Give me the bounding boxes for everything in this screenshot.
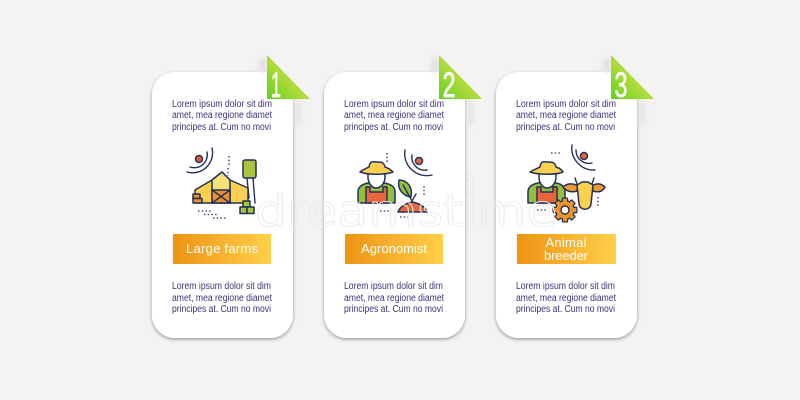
panel: card 3 background [496, 72, 637, 338]
label button: Large farms [173, 234, 271, 264]
top text 2: Lorem ipsum dolor sit dim [344, 99, 444, 110]
watermark over cards: dreamstime [255, 186, 557, 237]
panel: card 1 background [152, 72, 293, 338]
watermark [255, 173, 557, 237]
top text 3: Lorem ipsum dolor sit dim [516, 99, 616, 110]
top text 1: Lorem ipsum dolor sit dim [172, 99, 272, 110]
label button: Animal breeder: Animal [546, 235, 587, 250]
card 2: Agronomist [324, 55, 482, 338]
top text 1: principes at. Cum no movi [172, 122, 271, 133]
bottom text 1: Lorem ipsum dolor sit dim [172, 281, 271, 292]
icon: farmer with cow, gear and signal [528, 145, 605, 222]
corner tab 2 [431, 55, 482, 125]
label button: Agronomist: Agronomist [361, 241, 427, 256]
bottom text 3: Lorem ipsum dolor sit dim [516, 281, 615, 292]
top text 3: principes at. Cum no movi [516, 122, 615, 133]
card 3: Animal breeder [496, 55, 654, 338]
label button: Animal breeder [517, 234, 616, 264]
bottom text 3: principes at. Cum no movi [516, 304, 615, 315]
corner tab 3: 3 [614, 66, 628, 105]
corner tab 2: 2 [442, 66, 456, 105]
top text 2: amet, mea regione diamet [344, 110, 444, 121]
top text 2: principes at. Cum no movi [344, 122, 443, 133]
bottom text 2: amet, mea regione diamet [344, 293, 444, 304]
icon: farmer with plant and signal [358, 150, 432, 217]
card 1: Large farms [152, 55, 310, 338]
bottom text 3: amet, mea regione diamet [516, 293, 616, 304]
panel: card 2 background [324, 72, 465, 338]
bottom text 2: principes at. Cum no movi [344, 304, 443, 315]
corner tab 3 [603, 55, 654, 125]
bottom text 2: Lorem ipsum dolor sit dim [344, 281, 443, 292]
corner tab 1 [259, 55, 310, 125]
bottom text 1: principes at. Cum no movi [172, 304, 271, 315]
watermark: dreamstime [255, 186, 557, 237]
icon: farm with barn, signal, silo and hay [187, 148, 256, 218]
corner tab 1: 1 [271, 66, 281, 105]
label button: Agronomist [345, 234, 443, 264]
label button: Large farms: Large farms [186, 241, 258, 256]
label button: Animal breeder: breeder [544, 248, 589, 263]
top text 1: amet, mea regione diamet [172, 110, 272, 121]
top text 3: amet, mea regione diamet [516, 110, 616, 121]
bottom text 1: amet, mea regione diamet [172, 293, 272, 304]
